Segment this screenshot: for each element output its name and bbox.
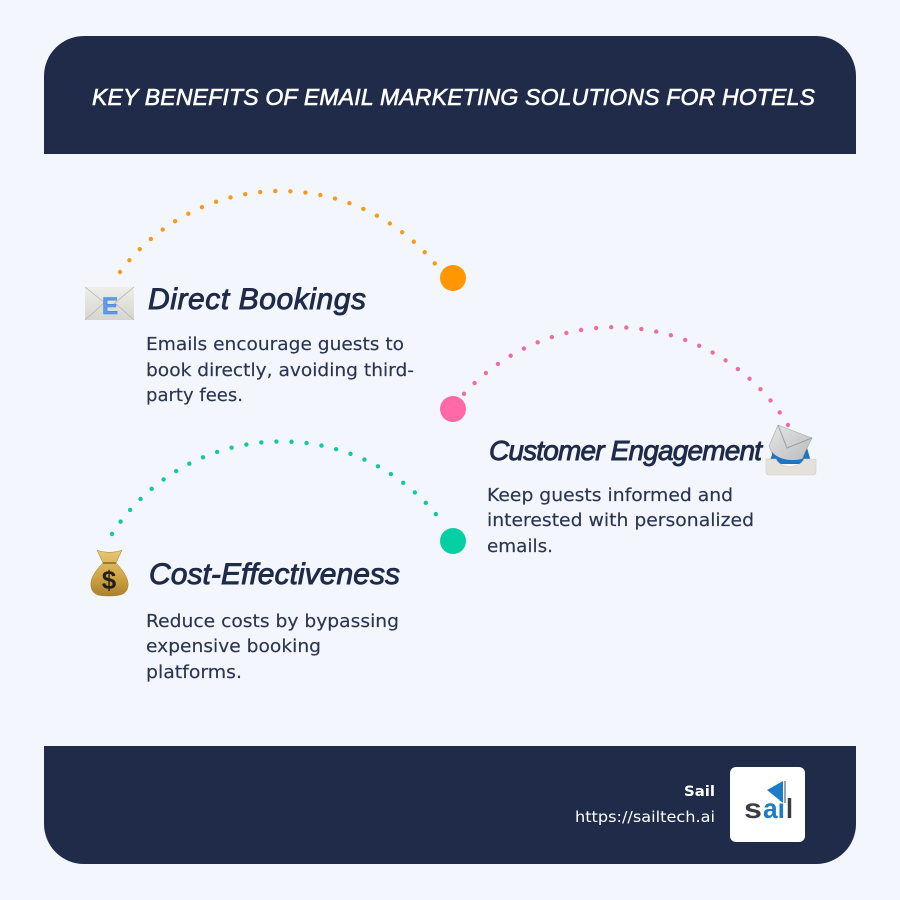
text block: Emails encourage guests to (146, 334, 404, 355)
panel: customer engagement (487, 425, 816, 557)
text block: book directly, avoiding third- (146, 360, 414, 381)
text block: Reduce costs by bypassing (146, 611, 399, 632)
arc connector: direct bookings (120, 191, 466, 291)
text block: platforms. (146, 662, 242, 683)
text block: interested with personalized (487, 510, 754, 531)
icon: envelope with letter E (85, 287, 134, 320)
brand name: Sail (684, 784, 715, 800)
heading: Customer Engagement (489, 435, 763, 466)
arc connector: cost-effectiveness (112, 441, 466, 554)
panel: direct bookings (85, 283, 420, 406)
icon: envelope with letter E: E (102, 293, 118, 320)
logo: sail: ai (763, 793, 785, 824)
panel: cost-effectiveness (91, 550, 405, 683)
icon: envelope in inbox tray (766, 425, 816, 475)
text block: emails. (487, 536, 553, 557)
title: KEY BENEFITS OF EMAIL MARKETING SOLUTIONS FOR HOTELS (92, 84, 816, 110)
logo: sail: s (744, 793, 762, 824)
text block: party fees. (146, 385, 243, 406)
text block: Keep guests informed and (487, 485, 733, 506)
text block: expensive booking (146, 636, 321, 657)
logo: sail (730, 767, 805, 842)
heading: Cost-Effectiveness (149, 558, 400, 591)
heading: Direct Bookings (148, 283, 366, 316)
arc connector: customer engagement (440, 327, 788, 425)
title banner (44, 36, 856, 154)
icon: money bag: $ (102, 565, 117, 595)
brand url: https://sailtech.ai (575, 808, 715, 826)
logo: sail: l (786, 793, 793, 824)
icon: money bag (91, 550, 128, 596)
footer banner (44, 746, 856, 864)
